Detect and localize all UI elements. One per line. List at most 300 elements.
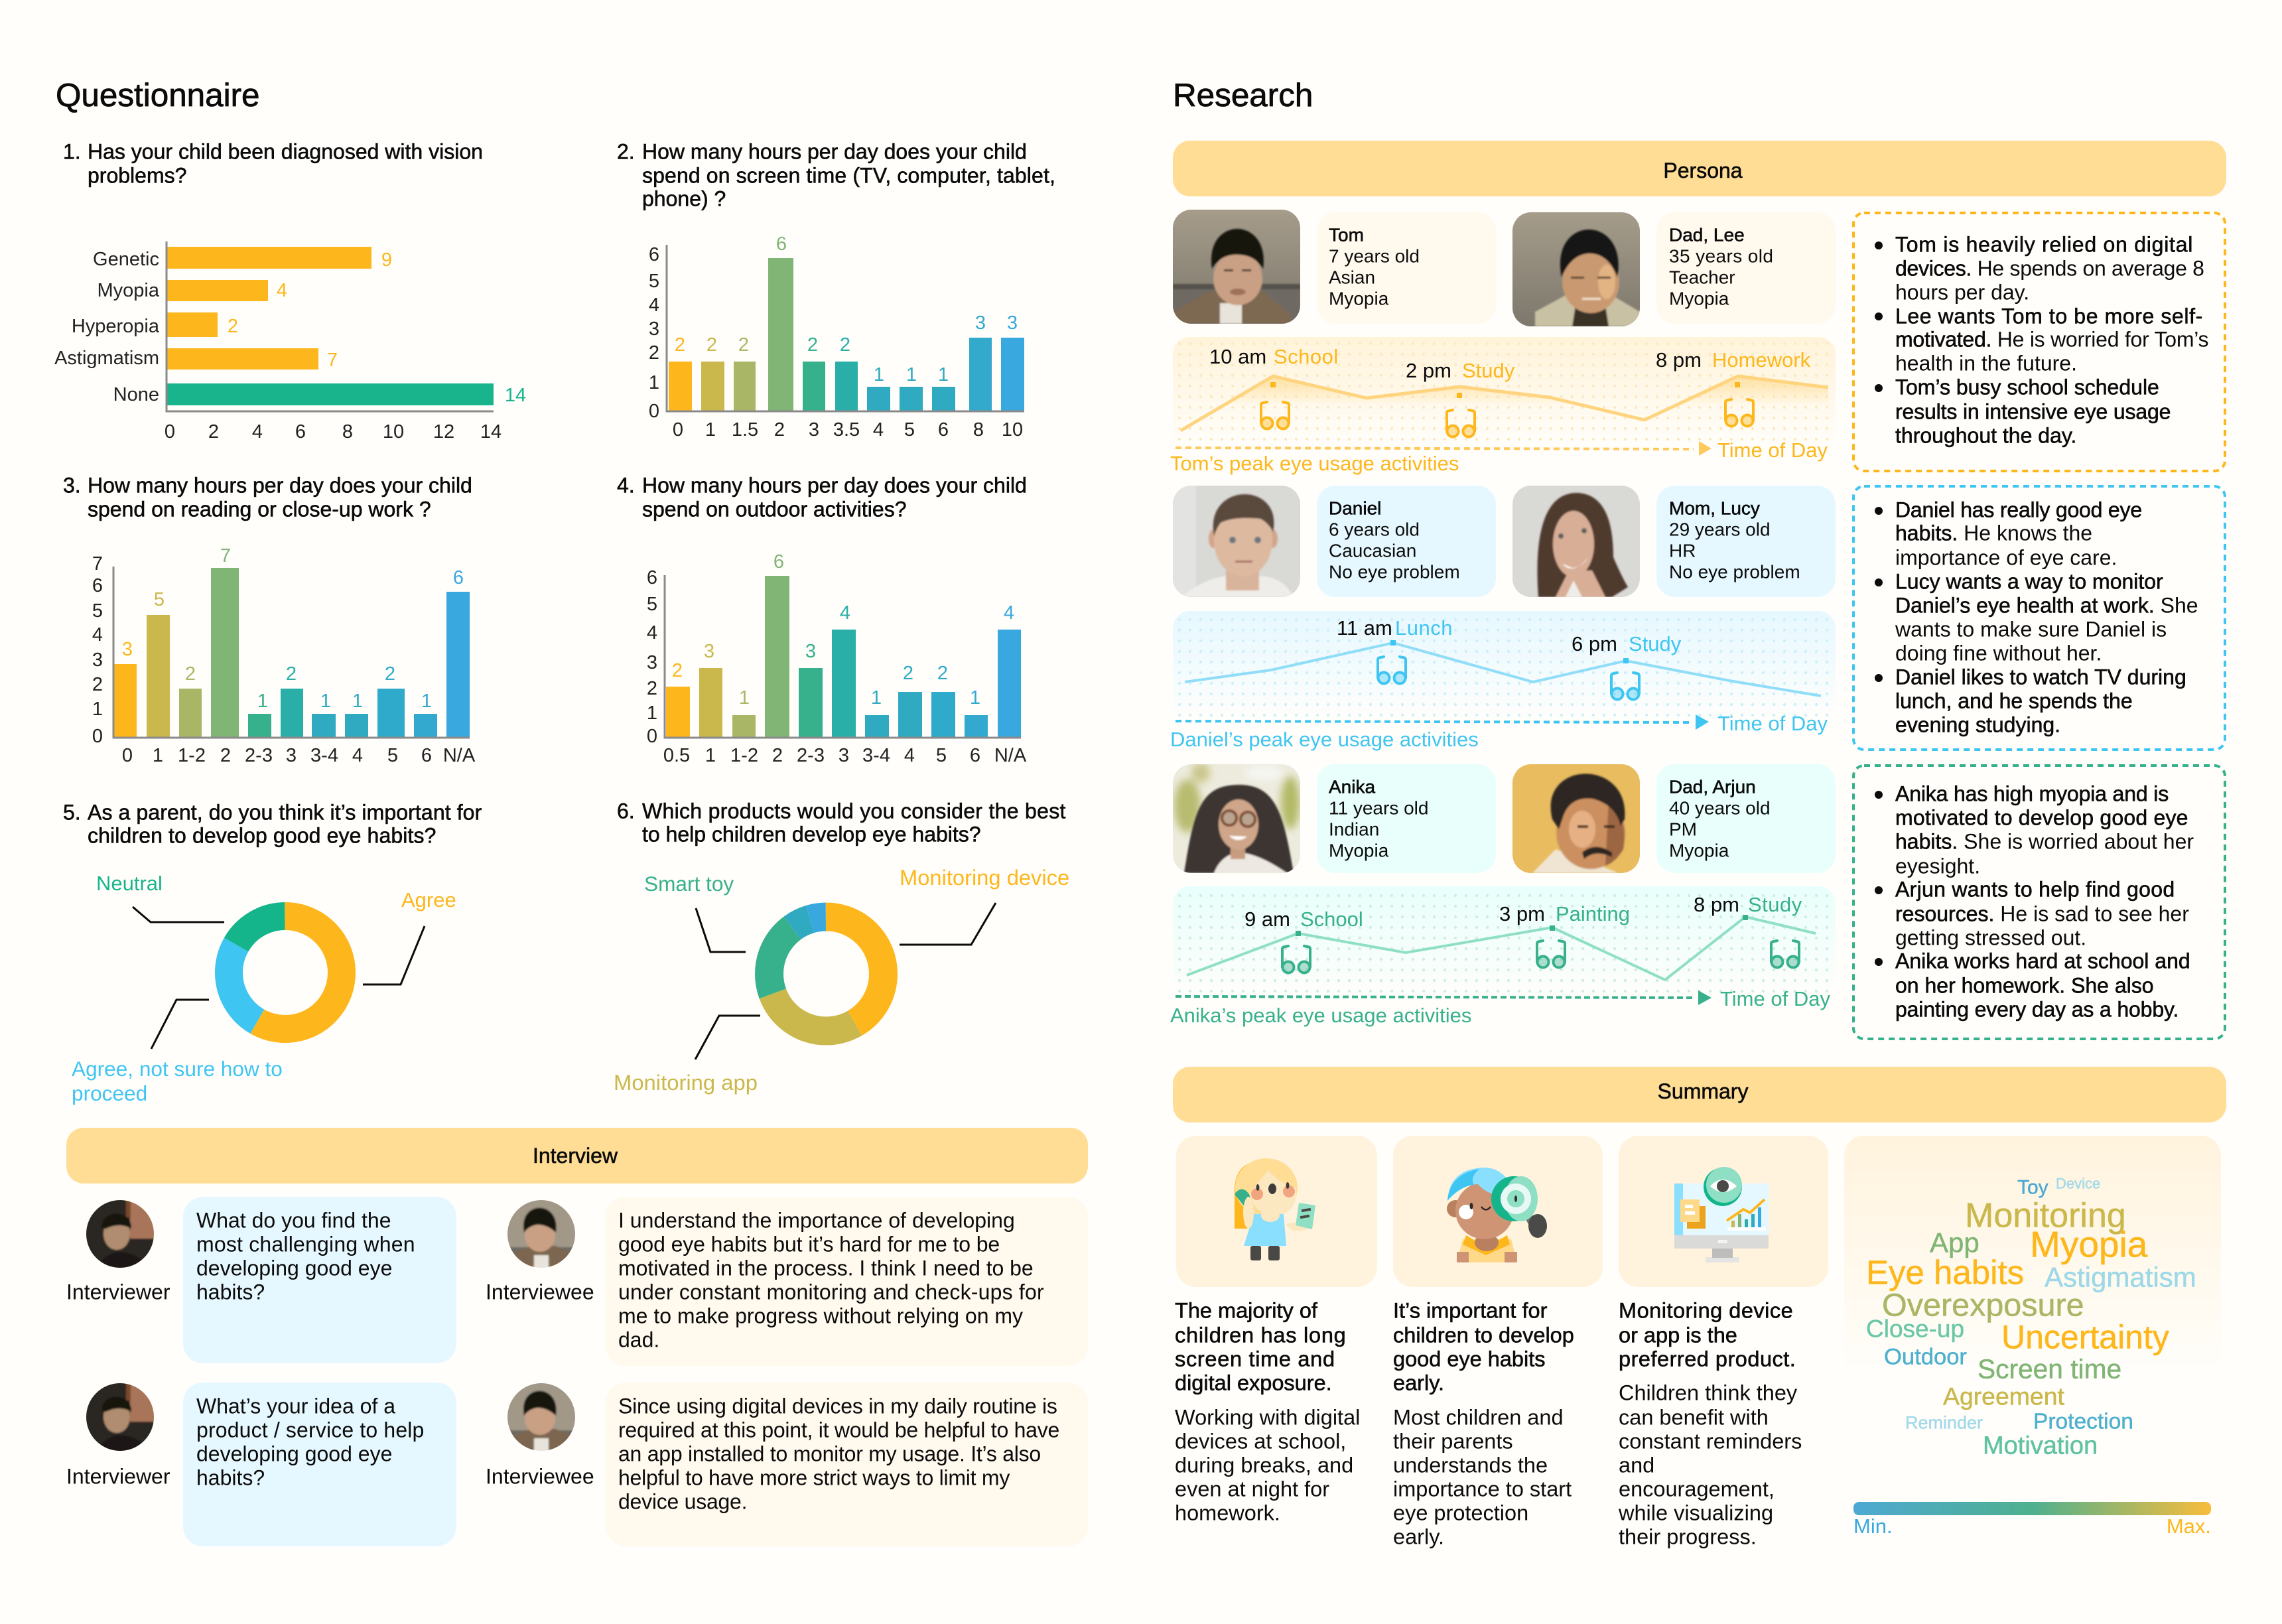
line chart: Tom's peak eye usage: Homework xyxy=(1712,348,1811,372)
line chart: Daniel's peak eye usage: 11 am xyxy=(1337,616,1392,640)
callout: Daniel notes: doing fine without her. xyxy=(1895,641,2102,665)
bar chart: question 1: 0 xyxy=(165,421,175,442)
line chart: Tom's peak eye usage: Time of Day xyxy=(1717,439,1828,462)
summary text 2: their parents xyxy=(1393,1429,1513,1453)
bar chart: question 1: 7 xyxy=(327,350,338,371)
callout: Tom notes: devices. He spends on average 8 xyxy=(1895,256,2204,280)
icon: monitor with eye and chart xyxy=(1674,1167,1769,1262)
persona card: Anika: Indian xyxy=(1329,819,1379,840)
answer bubble 2: helpful to have more strict ways to limit my xyxy=(618,1466,1010,1490)
bar chart: question 4: 5 xyxy=(936,745,947,766)
avatar: interviewee xyxy=(507,1200,575,1268)
bar chart: question 3 xyxy=(92,545,476,766)
callout: Daniel notes: Daniel has really good eye xyxy=(1895,498,2142,521)
question 3 heading: spend on reading or close-up work ? xyxy=(88,498,431,521)
summary text 1: The majority of xyxy=(1175,1299,1318,1323)
panel: summary card 1 xyxy=(1176,1136,1377,1287)
line chart: Anika's peak eye usage: 3 pm xyxy=(1499,902,1545,925)
bar chart: question 2: 1 xyxy=(705,419,716,440)
label: interviewee: Interviewee xyxy=(486,1280,594,1304)
icon: glasses at 6 pm xyxy=(1611,673,1639,699)
question 2 heading: How many hours per day does your child xyxy=(642,139,1027,163)
bar chart: question 1: Astigmatism xyxy=(54,348,159,369)
line chart: Anika's peak eye usage: 8 pm xyxy=(1694,893,1739,916)
question 2 heading: 2. xyxy=(617,139,635,163)
bar chart: question 4: 3 xyxy=(647,652,657,673)
callout: Tom notes: hours per day. xyxy=(1895,280,2029,304)
bar chart: question 4 xyxy=(647,551,1027,766)
callout: Anika notes: motivated to develop good eye xyxy=(1895,805,2188,829)
callout: Anika notes: eyesight. xyxy=(1895,854,1980,878)
icon: child with magnifying glass xyxy=(1447,1168,1547,1262)
callout: Anika notes: getting stressed out. xyxy=(1895,926,2086,950)
callout: Daniel notes xyxy=(1853,486,2225,750)
bar chart: question 3: 2 xyxy=(92,674,103,695)
bar chart: question 1: 9 xyxy=(381,249,392,271)
summary text 3: their progress. xyxy=(1619,1524,1757,1548)
line chart: Anika's peak eye usage: Study xyxy=(1748,893,1802,916)
persona card: Lee: 35 years old xyxy=(1669,245,1773,267)
panel: word cloud: Toy xyxy=(2017,1177,2048,1198)
summary text 1: digital exposure. xyxy=(1175,1371,1332,1394)
interview row 1 xyxy=(66,1194,1088,1366)
icon: glasses at 2 pm xyxy=(1447,410,1475,437)
panel: word cloud: Outdoor xyxy=(1884,1344,1967,1369)
bar chart: question 2: 2 xyxy=(649,342,659,364)
line chart: Tom's peak eye usage: 10 am xyxy=(1209,345,1266,368)
bar chart: question 4: 2 xyxy=(937,663,948,684)
summary text 3: while visualizing xyxy=(1618,1501,1773,1524)
summary text 2: good eye habits xyxy=(1393,1347,1545,1371)
bar chart: question 1: 14 xyxy=(480,421,502,442)
bar chart: question 2: 4 xyxy=(649,295,659,316)
bar chart: question 2: 3 xyxy=(1007,312,1018,334)
question 5 heading: children to develop good eye habits? xyxy=(88,824,436,848)
question 3 heading: 3. xyxy=(63,474,81,498)
banner: Summary xyxy=(1173,1067,2226,1122)
avatar: interviewer xyxy=(86,1200,154,1268)
donut chart: question 5 xyxy=(72,872,456,1105)
icon: glasses at 8 pm xyxy=(1771,941,1799,967)
bar chart: question 2: 2 xyxy=(807,334,818,356)
donut chart: question 6: Smart toy xyxy=(644,872,734,896)
bar chart: question 2: 1 xyxy=(938,364,949,385)
summary text 3: preferred product. xyxy=(1619,1347,1796,1371)
interview row 2 xyxy=(66,1377,1088,1546)
bar chart: question 1: 12 xyxy=(433,421,454,442)
bar chart: question 4: 1-2 xyxy=(730,745,758,766)
summary text 1: devices at school, xyxy=(1175,1429,1346,1453)
photo: Tom xyxy=(1173,210,1300,324)
question 6 heading: 6. xyxy=(617,799,635,823)
bar chart: question 2: 6 xyxy=(649,244,659,265)
panel: word cloud: Overexposure xyxy=(1882,1287,2084,1323)
callout: Anika notes: Anika has high myopia and is xyxy=(1895,781,2169,805)
persona card: Lee: Myopia xyxy=(1669,288,1729,309)
bar chart: question 2: 3 xyxy=(975,312,986,334)
callout: Daniel notes: wants to make sure Daniel is xyxy=(1895,617,2167,641)
bar chart: question 2: 3.5 xyxy=(833,419,860,440)
persona card: Daniel: Caucasian xyxy=(1329,540,1416,561)
callout: Anika notes: on her homework. She also xyxy=(1895,974,2154,998)
summary text 2: early. xyxy=(1393,1371,1444,1394)
callout: Daniel notes: habits. He knows the xyxy=(1895,521,2092,545)
persona card: Daniel xyxy=(1317,486,1496,597)
persona card: Arjun: Myopia xyxy=(1669,840,1729,861)
panel: word cloud: Protection xyxy=(2033,1409,2133,1434)
line chart: Anika's peak eye usage: Painting xyxy=(1556,902,1630,925)
bar chart: question 2: 8 xyxy=(973,419,984,440)
legend: colour scale xyxy=(1853,1502,2211,1538)
bar chart: question 1: 4 xyxy=(277,280,287,301)
summary text 3: can benefit with xyxy=(1619,1405,1769,1429)
bar chart: question 2: 2 xyxy=(706,334,717,356)
label: interviewer: Interviewer xyxy=(66,1280,170,1304)
callout: Tom notes: Lee wants Tom to be more self- xyxy=(1895,304,2203,328)
persona card: Anika: Anika xyxy=(1329,776,1375,797)
summary text 2: early. xyxy=(1393,1524,1444,1548)
bar chart: question 3: 4 xyxy=(92,624,103,645)
bar chart: question 3: 5 xyxy=(92,600,103,622)
callout: Daniel notes: Lucy wants a way to monitor xyxy=(1895,569,2163,593)
persona card: Anika: 11 years old xyxy=(1329,797,1428,819)
summary text 2: understands the xyxy=(1393,1453,1548,1477)
summary text 1: during breaks, and xyxy=(1175,1453,1353,1477)
callout: Anika notes: Arjun wants to help find good xyxy=(1895,877,2175,901)
question 4 heading: spend on outdoor activities? xyxy=(642,498,906,521)
bar chart: question 4: 1 xyxy=(970,687,980,709)
answer bubble 2: required at this point, it would be helpful to have xyxy=(618,1418,1059,1442)
line chart: Daniel's peak eye usage: Time of Day xyxy=(1717,712,1828,735)
photo: Anika xyxy=(1173,763,1300,873)
summary text 2: importance to start xyxy=(1393,1477,1572,1501)
bar chart: question 1: 14 xyxy=(505,385,526,406)
bar chart: question 2: 1 xyxy=(649,372,659,393)
persona card: Anika: Myopia xyxy=(1329,840,1389,861)
callout: Daniel notes: importance of eye care. xyxy=(1895,545,2117,569)
answer bubble 2: Since using digital devices in my daily routine is xyxy=(618,1394,1057,1418)
donut chart: question 5: proceed xyxy=(72,1081,147,1105)
line chart: Daniel's peak eye usage: Study xyxy=(1629,632,1682,655)
bar chart: question 3: 3 xyxy=(286,745,297,766)
donut chart: question 5: Agree, not sure how to xyxy=(72,1057,283,1081)
bar chart: question 3: 0 xyxy=(92,726,103,747)
bar chart: question 2: 3 xyxy=(809,419,819,440)
question 5 heading: As a parent, do you think it’s important for xyxy=(88,800,482,824)
question 1 heading: Has your child been diagnosed with vision xyxy=(88,139,483,163)
question 6 heading: to help children develop eye habits? xyxy=(642,823,981,846)
callout: Tom notes: results in intensive eye usage xyxy=(1895,399,2171,423)
bar chart: question 3: 7 xyxy=(220,545,231,567)
persona card: Daniel: 6 years old xyxy=(1329,519,1420,540)
line chart: Anika's peak eye usage: Anika’s peak eye usage activities xyxy=(1170,1004,1471,1027)
bar chart: question 2: 10 xyxy=(1002,419,1023,440)
callout: Daniel notes: evening studying. xyxy=(1895,712,2060,736)
bar chart: question 1: Genetic xyxy=(93,249,159,270)
persona card: Lucy: 29 years old xyxy=(1669,519,1771,540)
question bubble 2: developing good eye xyxy=(196,1442,392,1466)
question bubble 1: most challenging when xyxy=(196,1233,415,1256)
icon: glasses at 10 am xyxy=(1261,402,1289,429)
question 5 heading: 5. xyxy=(63,800,81,824)
bar chart: question 3: 1-2 xyxy=(178,745,206,766)
question bubble 1: What do you find the xyxy=(196,1209,391,1233)
callout: Anika notes xyxy=(1853,766,2225,1039)
callout: Daniel notes: Daniel’s eye health at work. She xyxy=(1895,593,2198,617)
bar chart: question 3: 1 xyxy=(352,691,363,712)
bar chart: question 4: 4 xyxy=(840,602,850,624)
persona card: Lucy xyxy=(1656,486,1836,597)
line chart: Tom's peak eye usage: Tom’s peak eye usage activities xyxy=(1170,452,1459,475)
bar chart: question 4: 3-4 xyxy=(862,745,890,766)
bar chart: question 2: 4 xyxy=(873,419,884,440)
persona card: Lee: Teacher xyxy=(1669,267,1735,288)
icon: girl with tablet xyxy=(1235,1158,1315,1260)
line chart: Daniel's peak eye usage: 6 pm xyxy=(1572,632,1617,655)
banner: Interview: Interview xyxy=(533,1144,618,1168)
bar chart: question 3: 1 xyxy=(257,691,268,712)
callout: Tom notes: health in the future. xyxy=(1895,352,2077,375)
donut chart: question 6: Monitoring device xyxy=(900,865,1069,890)
icon: glasses at 3 pm xyxy=(1537,941,1565,967)
summary text 1: children has long xyxy=(1175,1323,1346,1347)
persona card: Lucy: No eye problem xyxy=(1669,561,1800,582)
panel: word cloud xyxy=(1844,1136,2221,1459)
callout: Anika notes: habits. She is worried about her xyxy=(1895,829,2194,853)
persona card: Lee xyxy=(1656,212,1836,324)
bar chart: question 3: 1 xyxy=(92,699,103,720)
bar chart: question 2: 0 xyxy=(673,419,683,440)
panel: word cloud: App xyxy=(1930,1227,1980,1258)
bar chart: question 1: Hyperopia xyxy=(72,316,160,337)
icon: glasses at 9 am xyxy=(1282,946,1310,973)
bar chart: question 3: 6 xyxy=(92,575,103,596)
line chart: Anika's peak eye usage: Time of Day xyxy=(1720,987,1830,1010)
question bubble 2: What’s your idea of a xyxy=(196,1394,395,1418)
label: interviewee: Interviewee xyxy=(486,1465,594,1489)
persona card: Lee: Dad, Lee xyxy=(1669,224,1745,245)
bar chart: question 4: 1 xyxy=(705,745,716,766)
avatar: interviewee xyxy=(507,1383,575,1451)
answer bubble 2: an app installed to monitor my usage. It’s also xyxy=(618,1442,1041,1466)
callout: Tom notes: Tom’s busy school schedule xyxy=(1895,375,2159,399)
question bubble 2: product / service to help xyxy=(196,1418,424,1442)
bar chart: question 4: 1 xyxy=(739,687,750,709)
bar chart: question 1: Myopia xyxy=(97,280,160,301)
line chart: Daniel's peak eye usage: Daniel’s peak eye usage activities xyxy=(1170,728,1479,751)
callout: Anika notes: Anika works hard at school and xyxy=(1895,949,2190,973)
question 2 heading: phone) ? xyxy=(642,187,726,211)
bar chart: question 2: 6 xyxy=(938,419,949,440)
bar chart: question 4: 5 xyxy=(647,594,657,615)
bar chart: question 1: 8 xyxy=(342,421,353,442)
line chart: Anika's peak eye usage xyxy=(1170,886,1836,1027)
line chart: Daniel's peak eye usage: Lunch xyxy=(1395,616,1453,640)
avatar: interviewer xyxy=(86,1383,154,1451)
donut chart: question 6: Monitoring app xyxy=(614,1070,758,1095)
summary text 3: constant reminders xyxy=(1619,1429,1802,1453)
panel: summary card 3 xyxy=(1619,1136,1828,1287)
bar chart: question 4: 3 xyxy=(839,745,849,766)
summary text 2: Most children and xyxy=(1393,1405,1564,1429)
callout: Tom notes: motivated. He is worried for Tom’s xyxy=(1895,328,2208,352)
summary text 2: children to develop xyxy=(1393,1323,1574,1347)
bar chart: question 2: 0 xyxy=(649,401,659,422)
bar chart: question 1: 10 xyxy=(383,421,404,442)
bar chart: question 3: 2 xyxy=(286,663,297,685)
panel: word cloud: Screen time xyxy=(1978,1353,2121,1384)
persona card: Tom: Myopia xyxy=(1329,288,1389,309)
summary text 3: encouragement, xyxy=(1619,1477,1775,1501)
summary text 3: Children think they xyxy=(1619,1381,1798,1405)
bar chart: question 3: 3 xyxy=(92,649,103,671)
bar chart: question 1: None xyxy=(113,384,159,405)
bar chart: question 4: 0.5 xyxy=(663,745,690,766)
donut chart: question 6 xyxy=(614,865,1069,1095)
photo: Arjun xyxy=(1512,764,1640,873)
line chart: Tom's peak eye usage: Study xyxy=(1462,359,1515,382)
answer bubble 1 xyxy=(606,1197,1088,1366)
question bubble 1 xyxy=(183,1197,456,1363)
bar chart: question 3: 6 xyxy=(453,567,464,588)
bar chart: question 4: 2-3 xyxy=(797,745,825,766)
bar chart: question 2: 2 xyxy=(840,334,850,356)
question bubble 2 xyxy=(183,1383,456,1546)
callout: Anika notes: resources. He is sad to see her xyxy=(1895,902,2189,926)
panel: word cloud: Motivation xyxy=(1983,1432,2098,1459)
callout: Tom notes xyxy=(1853,213,2225,471)
question bubble 1: habits? xyxy=(196,1280,265,1304)
legend: colour scale: Min. xyxy=(1853,1515,1893,1538)
bar chart: question 3: 2 xyxy=(385,663,395,685)
question 4 heading: 4. xyxy=(617,474,635,498)
bar chart: question 4: 1 xyxy=(871,687,882,709)
bar chart: question 2: 2 xyxy=(738,334,749,356)
panel: word cloud: Device xyxy=(2056,1176,2100,1191)
label: interviewer: Interviewer xyxy=(66,1465,170,1489)
bar chart: question 4: 0 xyxy=(647,726,657,747)
banner: Summary: Summary xyxy=(1658,1079,1748,1103)
question bubble 1: developing good eye xyxy=(196,1256,392,1280)
bar chart: question 1: 2 xyxy=(228,316,238,337)
answer bubble 1: motivated in the process. I think I need to be xyxy=(618,1256,1034,1280)
panel: word cloud: Astigmatism xyxy=(2045,1262,2196,1292)
bar chart: question 3: 7 xyxy=(92,553,103,575)
bar chart: question 4: 4 xyxy=(647,622,657,643)
question 1 heading: 1. xyxy=(63,139,81,163)
bar chart: question 4: 6 xyxy=(773,551,784,573)
bar chart: question 3: 5 xyxy=(154,589,165,610)
summary text 1: Working with digital xyxy=(1175,1405,1360,1429)
panel: word cloud: Close-up xyxy=(1866,1315,1964,1343)
callout: Daniel notes: lunch, and he spends the xyxy=(1895,689,2133,712)
icon: glasses at 8 pm xyxy=(1725,399,1753,426)
question 6 heading: Which products would you consider the best xyxy=(642,799,1066,823)
callout: Tom notes: throughout the day. xyxy=(1895,423,2076,447)
panel: word cloud: Eye habits xyxy=(1866,1254,2024,1291)
bar chart: question 2: 5 xyxy=(904,419,915,440)
bar chart: question 4: 2 xyxy=(903,663,913,684)
summary text 3: and xyxy=(1619,1453,1654,1477)
bar chart: question 1: 6 xyxy=(295,421,306,442)
persona card: Tom: 7 years old xyxy=(1329,245,1420,267)
title: Research: Research xyxy=(1173,77,1313,113)
bar chart: question 3: 3-4 xyxy=(310,745,338,766)
persona card: Lucy: Mom, Lucy xyxy=(1669,498,1760,519)
summary text 2: eye protection xyxy=(1393,1501,1528,1524)
summary text 2: It’s important for xyxy=(1393,1299,1548,1323)
panel: word cloud: Monitoring xyxy=(1965,1197,2126,1235)
bar chart: question 4: 2 xyxy=(772,745,783,766)
question 4 heading: How many hours per day does your child xyxy=(642,474,1027,498)
title: Questionnaire: Questionnaire xyxy=(56,77,260,113)
bar chart: question 4: 1 xyxy=(647,703,657,724)
persona card: Lucy: HR xyxy=(1669,540,1696,561)
persona card: Arjun: 40 years old xyxy=(1669,797,1771,819)
line chart: Anika's peak eye usage: 9 am xyxy=(1244,908,1290,931)
answer bubble 1: me to make progress without relying on my xyxy=(618,1304,1023,1328)
line chart: Tom's peak eye usage xyxy=(1170,337,1836,475)
line chart: Daniel's peak eye usage xyxy=(1170,611,1836,751)
bar chart: question 2: 2 xyxy=(675,334,685,356)
bar chart: question 3: 4 xyxy=(352,745,363,766)
donut chart: question 5: Agree xyxy=(401,888,456,912)
persona card: Arjun: PM xyxy=(1669,819,1697,840)
question 2 heading: spend on screen time (TV, computer, tablet, xyxy=(642,163,1055,187)
bar chart: question 2: 1.5 xyxy=(732,419,758,440)
callout: Tom notes: Tom is heavily relied on digital xyxy=(1895,232,2193,256)
persona card: Daniel: Daniel xyxy=(1329,498,1381,519)
answer bubble 1: I understand the importance of developing xyxy=(618,1209,1015,1233)
banner: Persona: Persona xyxy=(1663,159,1743,182)
bar chart: question 4: 6 xyxy=(647,567,657,588)
bar chart: question 2: 1 xyxy=(906,364,917,385)
bar chart: question 3: 6 xyxy=(421,745,432,766)
bar chart: question 3: 1 xyxy=(153,745,163,766)
bar chart: question 4: 2 xyxy=(672,660,683,681)
persona card: Tom: Asian xyxy=(1329,267,1375,288)
summary text 1: even at night for xyxy=(1175,1477,1329,1501)
bar chart: question 2: 5 xyxy=(649,271,659,292)
panel: word cloud: Agreement xyxy=(1943,1383,2065,1410)
summary text 1: homework. xyxy=(1175,1501,1280,1524)
bar chart: question 3: 1 xyxy=(320,691,331,712)
bar chart: question 1 xyxy=(54,241,526,442)
bar chart: question 2 xyxy=(649,234,1024,440)
answer bubble 2: device usage. xyxy=(618,1490,747,1514)
bar chart: question 3: 0 xyxy=(122,745,133,766)
bar chart: question 4: 4 xyxy=(904,745,915,766)
answer bubble 2 xyxy=(606,1383,1088,1546)
donut chart: question 5: Neutral xyxy=(96,872,163,895)
bar chart: question 3: 2 xyxy=(185,663,196,685)
question bubble 2: habits? xyxy=(196,1466,265,1490)
persona card: Anika xyxy=(1317,764,1496,873)
icon: glasses at 11 am xyxy=(1378,657,1406,683)
bar chart: question 2: 3 xyxy=(649,318,659,340)
line chart: Tom's peak eye usage: 8 pm xyxy=(1656,348,1702,372)
summary text 3: Monitoring device xyxy=(1619,1299,1793,1323)
line chart: Tom's peak eye usage: School xyxy=(1274,345,1339,368)
line chart: Anika's peak eye usage: School xyxy=(1300,908,1363,931)
bar chart: question 2: 2 xyxy=(774,419,785,440)
question 1 heading: problems? xyxy=(88,163,186,187)
answer bubble 1: dad. xyxy=(618,1328,659,1352)
persona card: Arjun: Dad, Arjun xyxy=(1669,776,1756,797)
photo: Lucy xyxy=(1512,486,1640,597)
summary text 3: or app is the xyxy=(1619,1323,1737,1347)
panel: word cloud: Uncertainty xyxy=(2001,1319,2169,1356)
